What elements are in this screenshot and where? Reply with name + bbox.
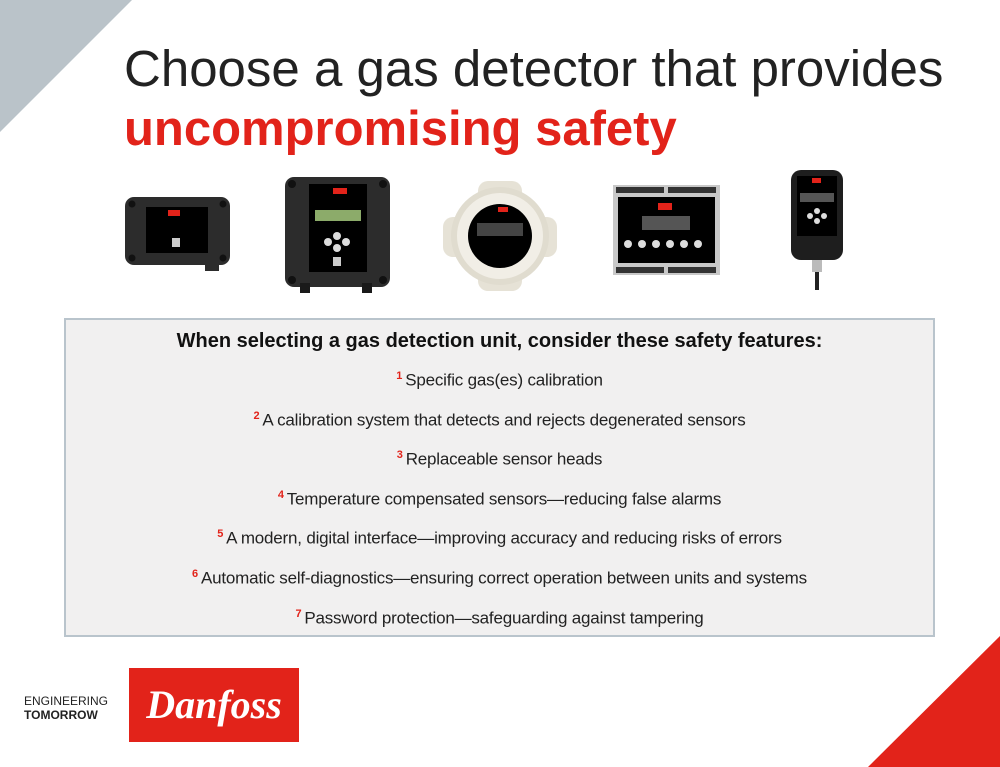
item 3: 3Replaceable sensor heads: [397, 449, 602, 469]
tagline: ENGINEERING: [24, 694, 108, 708]
devices illustration: [125, 170, 843, 293]
device 4: [613, 185, 720, 275]
tagline: TOMORROW: [24, 708, 98, 722]
panel heading: When selecting a gas detection unit, consider these safety features:: [177, 330, 822, 352]
device 2: [285, 177, 390, 293]
title: uncompromising safety: [124, 102, 677, 156]
device 5: [791, 170, 843, 290]
item 5: 5A modern, digital interface—improving accuracy and reducing risks of errors: [217, 528, 782, 548]
item 1: 1Specific gas(es) calibration: [396, 370, 603, 390]
decorative triangle bottom-right: [868, 636, 1000, 767]
panel: safety features: [64, 318, 935, 637]
item 4: 4Temperature compensated sensors—reducing false alarms: [278, 489, 721, 509]
title: Choose a gas detector that provides: [124, 40, 943, 97]
title: [124, 40, 943, 156]
item 2: 2A calibration system that detects and rejects degenerated sensors: [253, 410, 746, 430]
logo: Danfoss: Danfoss: [146, 682, 282, 727]
device 1: [125, 197, 230, 271]
decorative triangle top-left: [0, 0, 132, 132]
device 3: [443, 181, 557, 291]
logo: Danfoss: [129, 668, 299, 742]
item 6: 6Automatic self-diagnostics—ensuring correct operation between units and systems: [192, 568, 807, 588]
item 7: 7Password protection—safeguarding against tampering: [295, 608, 704, 628]
tagline: [24, 694, 108, 722]
